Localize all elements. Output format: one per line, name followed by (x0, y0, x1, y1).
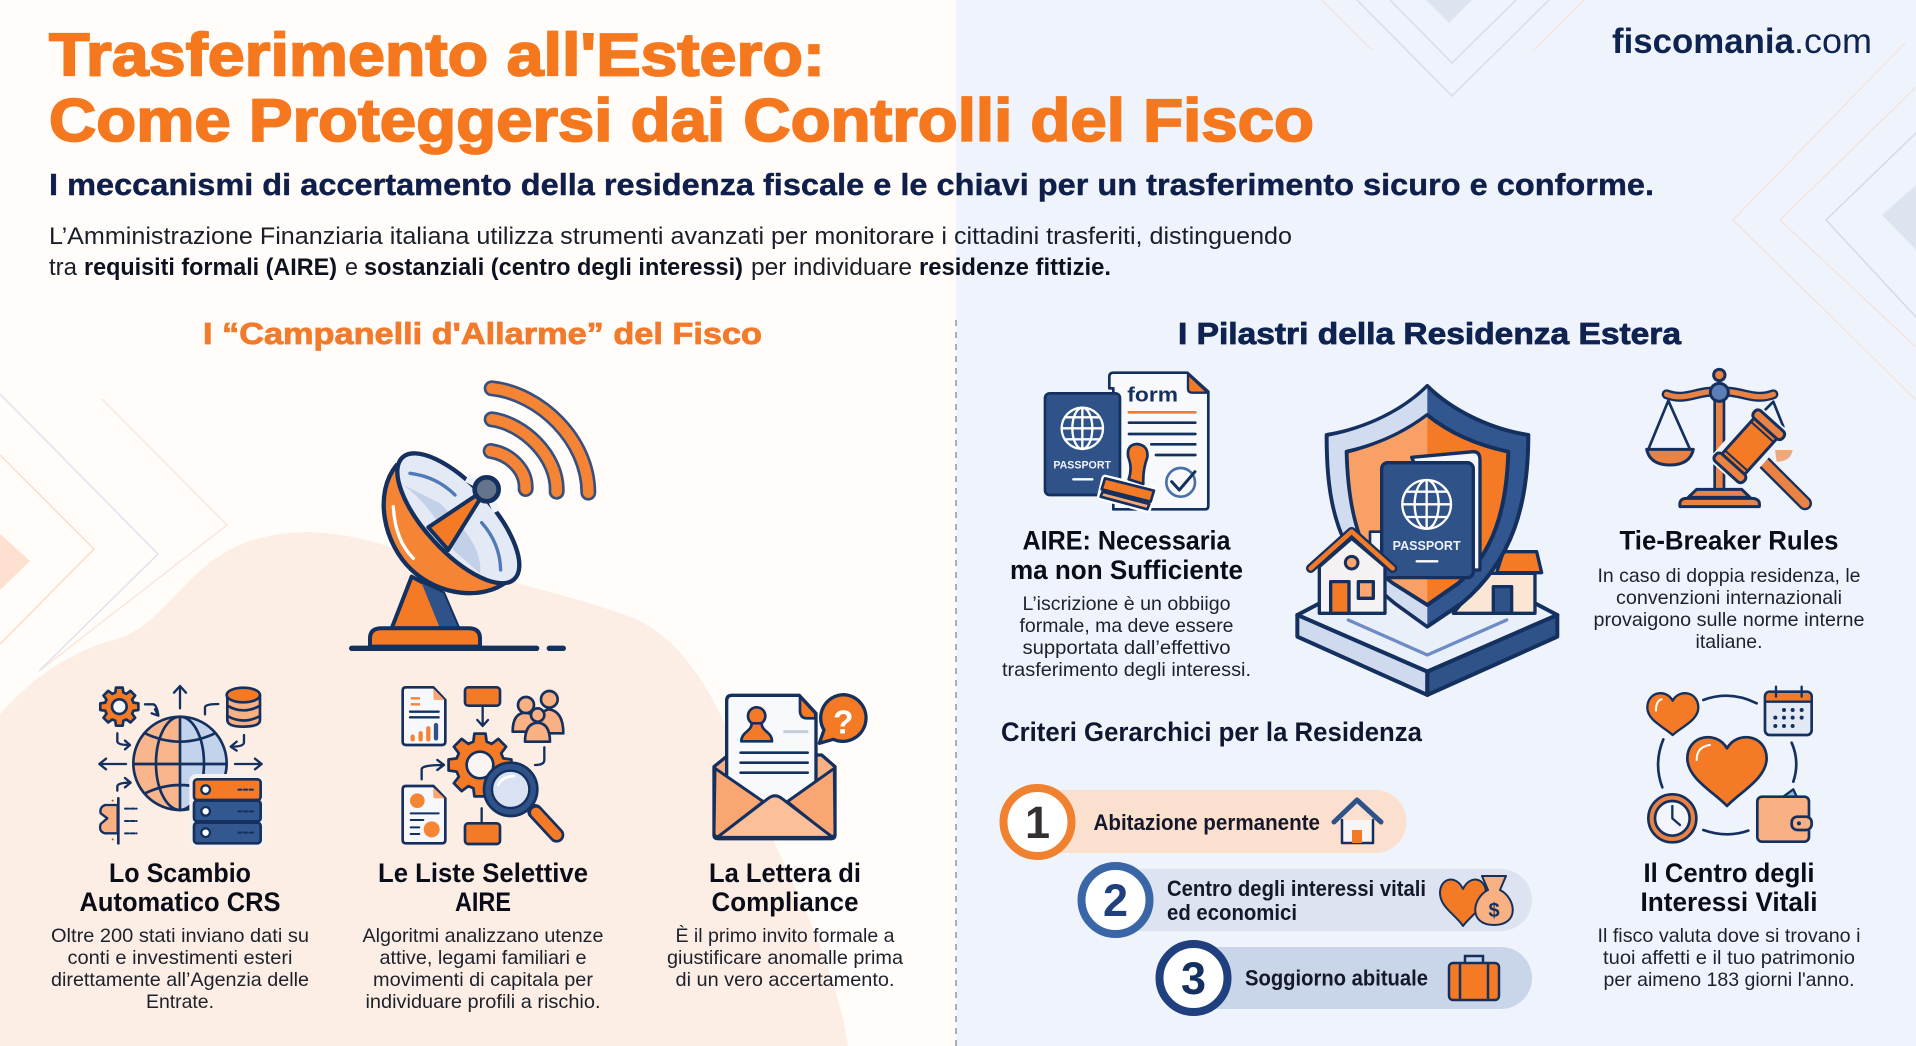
icon: scales and gavel (1647, 369, 1805, 507)
text: lo scambio automatico CRS: Lo Scambio (109, 858, 251, 888)
criterion 2: centro degli interessi (1082, 866, 1532, 934)
text: AIRE: L’iscrizione è un obbiigo (1022, 593, 1231, 615)
text: le liste selettive AIRE: attive, legami familiari e (380, 947, 586, 969)
heading: criteri gerarchici: Criteri Gerarchici per la Residenza (1001, 717, 1423, 747)
intro paragraph: sostanziali (centro degli interessi) (364, 254, 743, 281)
text: tie-breaker rules: italiane. (1696, 631, 1762, 653)
text: lo scambio automatico CRS: Automatico CRS (80, 887, 280, 917)
text: le liste selettive AIRE: Le Liste Selettive (378, 858, 588, 888)
text: AIRE: formale, ma deve essere (1020, 615, 1234, 637)
text: lo scambio automatico CRS: Entrate. (146, 991, 214, 1013)
intro paragraph (49, 223, 1292, 281)
intro paragraph: residenze fittizie. (919, 254, 1111, 281)
icon: shield with passport and houses: PASSPORT (1393, 538, 1461, 553)
text: AIRE: ma non Sufficiente (1010, 555, 1243, 585)
icon: passport and form (1045, 373, 1208, 509)
text: tie-breaker rules: provaigono sulle norme interne (1594, 609, 1864, 631)
icon: selective lists analysis (403, 687, 563, 844)
criterion 1: abitazione permanente: Abitazione permanente (1094, 810, 1320, 835)
criterion 1: abitazione permanente (1004, 788, 1406, 856)
text: il centro degli interessi vitali: per aimeno 183 giorni l'anno. (1604, 969, 1854, 991)
text: la lettera di compliance: di un vero accertamento. (676, 969, 894, 991)
text: le liste selettive AIRE: AIRE (455, 887, 511, 917)
intro paragraph: tra (49, 254, 78, 281)
text: le liste selettive AIRE: Algoritmi analizzano utenze (362, 925, 604, 947)
criterion 2: centro degli interessi: $ (1488, 900, 1500, 922)
icon: satellite dish (352, 388, 588, 648)
text: la lettera di compliance: Compliance (712, 887, 858, 917)
text: tie-breaker rules: convenzioni internazionali (1616, 587, 1842, 609)
text: lo scambio automatico CRS: direttamente all’Agenzia delle (51, 969, 309, 991)
text: la lettera di compliance: È il primo invito formale a (676, 924, 895, 947)
icon: passport and form: form (1127, 384, 1178, 407)
intro paragraph: per individuare (751, 254, 912, 281)
text: il centro degli interessi vitali: Il fisco valuta dove si trovano i (1598, 925, 1860, 947)
criterion 2: centro degli interessi: 2 (1103, 875, 1128, 926)
criterion 3: soggiorno abituale: 3 (1181, 953, 1206, 1004)
text: il centro degli interessi vitali (1598, 858, 1860, 991)
title: Come Proteggersi dai Controlli del Fisco (49, 87, 1314, 154)
heading: pilastri: I Pilastri della Residenza Estera (1178, 316, 1682, 351)
icon: compliance letter (714, 695, 866, 839)
intro paragraph: requisiti formali (AIRE) (84, 254, 337, 281)
text: la lettera di compliance (667, 858, 903, 991)
text: le liste selettive AIRE (362, 858, 604, 1013)
subtitle: I meccanismi di accertamento della residenza fiscale e le chiavi per un trasferimento sicuro e conforme. (49, 167, 1654, 202)
criterion 2: centro degli interessi: ed economici (1167, 900, 1297, 925)
title (49, 22, 1314, 154)
text: tie-breaker rules: Tie-Breaker Rules (1620, 526, 1838, 556)
text: AIRE: supportata dall’effettivo (1022, 637, 1231, 659)
heading: campanelli d'allarme: I “Campanelli d'Allarme” del Fisco (203, 316, 762, 351)
title: Trasferimento all'Estero: (49, 22, 825, 88)
criterion 2: centro degli interessi: Centro degli interessi vitali (1167, 876, 1426, 901)
icon: compliance letter: ? (833, 704, 853, 741)
logo: fiscomania.com: fiscomania (1612, 22, 1795, 61)
logo: fiscomania.com: .com (1794, 22, 1872, 61)
text: lo scambio automatico CRS (51, 858, 309, 1013)
text: il centro degli interessi vitali: Il Centro degli (1644, 858, 1814, 888)
icon: passport and form: PASSPORT (1053, 459, 1111, 471)
icon: hearts, calendar, clock, wallet (1647, 687, 1812, 842)
intro paragraph: L’Amministrazione Finanziaria italiana utilizza strumenti avanzati per monitorare i cittadini trasferiti, distinguendo (49, 223, 1292, 250)
text: le liste selettive AIRE: movimenti di capitala per (373, 969, 594, 991)
criterion 1: abitazione permanente: 1 (1025, 797, 1050, 848)
criterion 3: soggiorno abituale: Soggiorno abituale (1245, 966, 1428, 990)
text: lo scambio automatico CRS: Oltre 200 stati inviano dati su (51, 925, 309, 947)
text: AIRE (1002, 526, 1251, 681)
text: tie-breaker rules (1594, 526, 1864, 653)
text: il centro degli interessi vitali: Interessi Vitali (1640, 887, 1818, 917)
icon: shield with passport and houses (1297, 386, 1557, 695)
text: tie-breaker rules: In caso di doppia residenza, le (1598, 565, 1860, 587)
text: le liste selettive AIRE: individuare profili a rischio. (366, 991, 600, 1013)
text: la lettera di compliance: giustificare anomalle prima (667, 947, 903, 969)
icon: CRS globe and servers (99, 686, 265, 847)
text: la lettera di compliance: La Lettera di (709, 858, 861, 888)
text: AIRE: AIRE: Necessaria (1022, 526, 1231, 556)
text: il centro degli interessi vitali: tuoi affetti e il tuo patrimonio (1603, 947, 1855, 969)
criterion 3: soggiorno abituale (1160, 944, 1532, 1012)
text: AIRE: trasferimento degli interessi. (1002, 659, 1251, 681)
text: lo scambio automatico CRS: conti e investimenti esteri (68, 947, 292, 969)
intro paragraph: e (345, 254, 358, 281)
